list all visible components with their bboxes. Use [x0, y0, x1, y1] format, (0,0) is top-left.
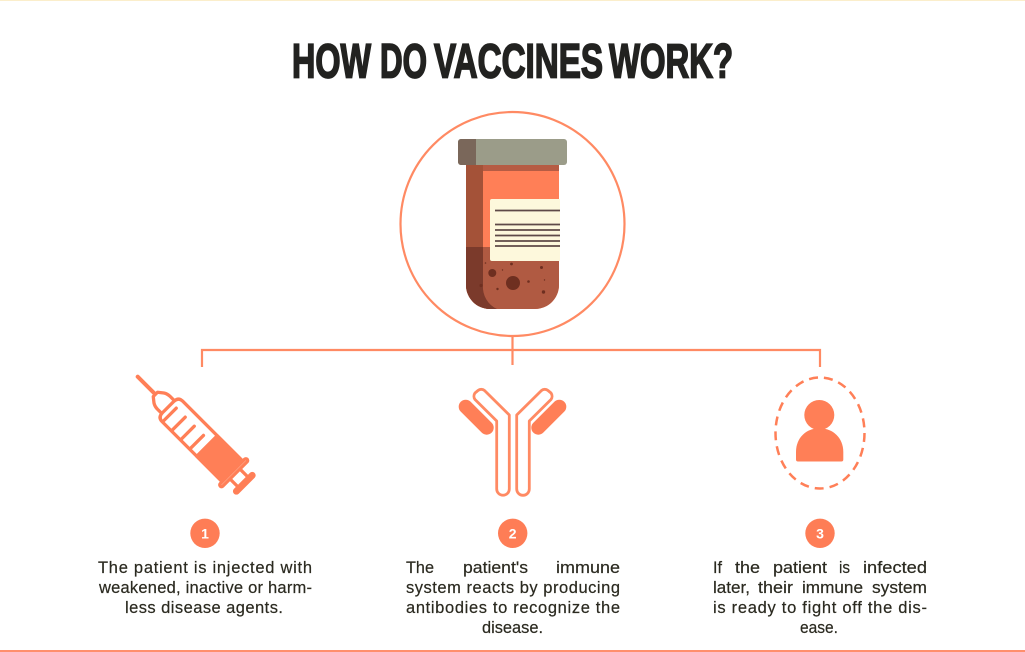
step 3 text: patient	[773, 559, 827, 577]
step 3 text: their	[758, 579, 794, 597]
step 2 text: disease.	[482, 619, 543, 637]
step 1 text: weakened, inactive or harm-	[98, 579, 312, 597]
bottle cap	[458, 139, 567, 165]
step 3 text: the	[735, 559, 760, 577]
step 3 text: infected	[863, 559, 927, 577]
step 1 text	[98, 559, 312, 617]
step 1 text: less disease agents.	[125, 599, 283, 617]
step 2 text: system reacts by producing	[406, 579, 620, 597]
step 3 text: later,	[713, 579, 750, 597]
icon: syringe	[124, 363, 259, 498]
step 2 text: The	[406, 559, 434, 577]
step 1 badge	[190, 519, 220, 548]
step 2 badge: 2	[509, 525, 517, 541]
step 3 text: system	[872, 579, 927, 597]
step 2 badge	[498, 519, 527, 548]
bottle body	[466, 165, 559, 309]
step 3 text: is	[839, 559, 850, 577]
step 3 text: is ready to fight off the dis-	[713, 599, 927, 617]
step 3 text: immune	[802, 579, 863, 597]
icon: antibody	[466, 389, 559, 495]
step 3 text: If	[713, 559, 722, 577]
connector lines	[202, 336, 820, 367]
title: DO	[380, 35, 427, 88]
step 3 text	[713, 559, 927, 637]
title: VACCINES	[434, 35, 603, 88]
step 3 badge: 3	[816, 525, 824, 541]
step 1 text: The patient is injected with	[98, 559, 312, 577]
step 1 badge: 1	[201, 525, 209, 541]
step 2 text	[406, 559, 620, 637]
bottle speckles	[479, 262, 545, 294]
icon: vaccine bottle in circle	[400, 112, 624, 336]
circle outline	[400, 112, 624, 336]
title: HOW	[292, 35, 371, 88]
step 2 text: immune	[556, 559, 620, 577]
step 3 text: ease.	[800, 619, 838, 637]
title	[292, 35, 733, 88]
icon: protected person	[776, 378, 864, 488]
step 3 badge	[805, 519, 835, 548]
step 2 text: patient's	[463, 559, 528, 577]
bottle label	[490, 199, 560, 261]
title: WORK?	[609, 35, 733, 88]
step 2 text: antibodies to recognize the	[406, 599, 620, 617]
